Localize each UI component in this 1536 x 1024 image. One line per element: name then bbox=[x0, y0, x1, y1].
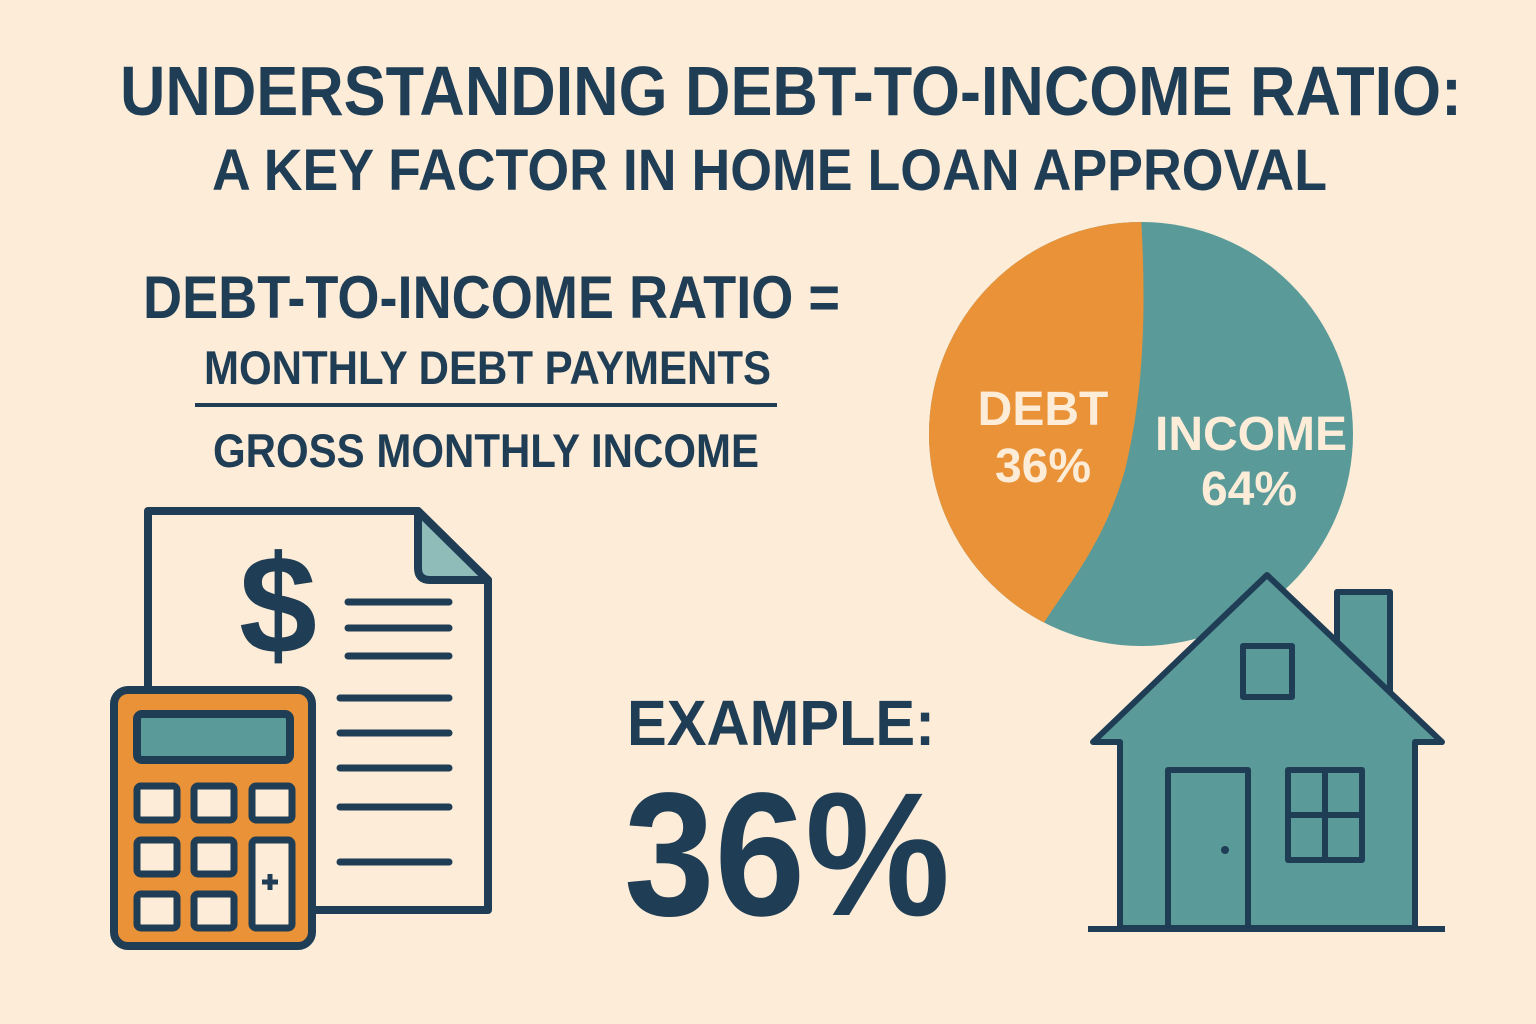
example text bbox=[624, 687, 950, 953]
pie label: debt bbox=[978, 383, 1108, 493]
example text: 36% bbox=[624, 757, 950, 953]
icon: calculator bbox=[114, 690, 312, 946]
formula: MONTHLY DEBT PAYMENTS bbox=[204, 341, 771, 394]
pie label: debt: 36% bbox=[995, 440, 1091, 493]
pie label: debt: DEBT bbox=[978, 383, 1108, 436]
formula bbox=[143, 264, 840, 477]
example text: EXAMPLE: bbox=[627, 687, 935, 759]
pie label: income: 64% bbox=[1201, 463, 1297, 516]
icon: house bbox=[1088, 575, 1445, 929]
icon: dollar sign: $ bbox=[239, 526, 317, 683]
title bbox=[120, 52, 1462, 203]
icon: document bbox=[148, 511, 488, 910]
pie label: income: INCOME bbox=[1155, 408, 1347, 461]
pie label: income bbox=[1155, 408, 1347, 516]
formula: DEBT-TO-INCOME RATIO = bbox=[143, 264, 840, 331]
pie chart bbox=[929, 222, 1353, 646]
title: A KEY FACTOR IN HOME LOAN APPROVAL bbox=[212, 138, 1327, 203]
formula: GROSS MONTHLY INCOME bbox=[213, 424, 759, 477]
